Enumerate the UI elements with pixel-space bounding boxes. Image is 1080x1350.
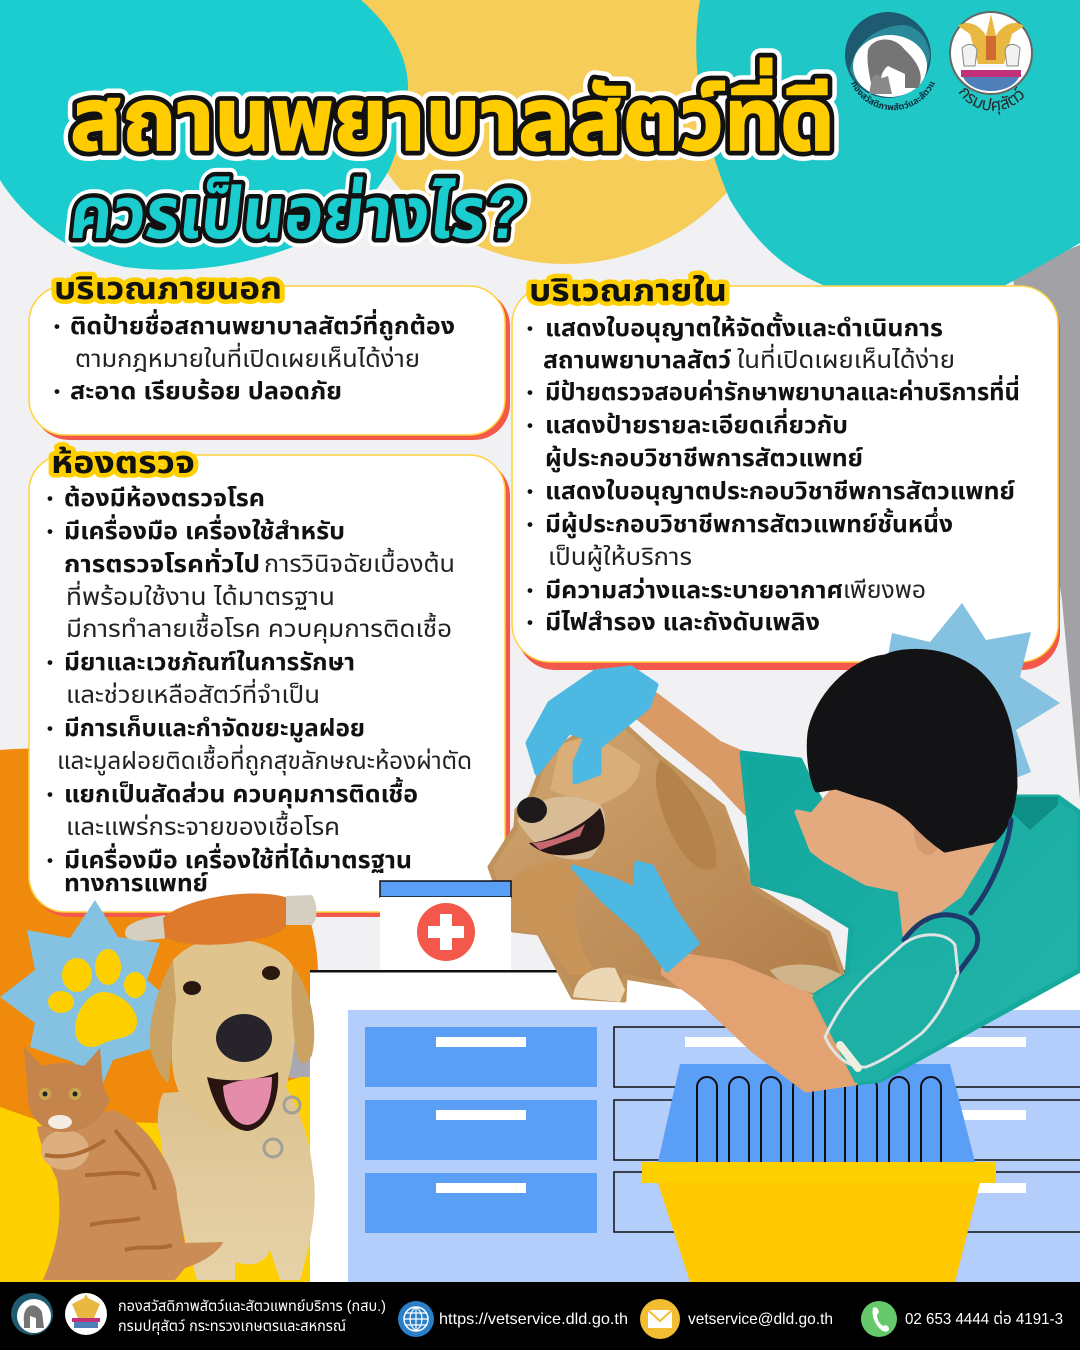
labrador body [158, 1085, 315, 1280]
text: inside area list: ผู้ประกอบวิชาชีพการสัตวแพทย์ [545, 444, 863, 473]
text: examination room list: การวินิจฉัยเบื้องต้น [264, 547, 455, 578]
blue star with paw [0, 900, 170, 1090]
reception counter [310, 970, 1080, 1282]
title [66, 58, 835, 254]
title: ควรเป็นอย่างไร? [66, 174, 530, 254]
vet scrubs [742, 753, 1080, 1083]
text: inside area list: มีป้ายตรวจสอบค่ารักษาพยาบาลและค่าบริการที่นี่ [545, 375, 1020, 406]
footer logos [11, 1293, 107, 1335]
text: examination room list: • [47, 522, 53, 541]
footer organisation text: กรมปศุสัตว์ กระทรวงเกษตรและสหกรณ์ [118, 1318, 346, 1335]
logo: department of livestock: กรมปศุสัตว์ [958, 86, 1024, 115]
text: outside area list: สะอาด เรียบร้อย ปลอดภัย [70, 377, 342, 405]
text: inside area list: • [527, 416, 533, 435]
text: examination room list: • [47, 785, 53, 804]
text: examination room list: และมูลฝอยติดเชื้อที่ถูกสุขลักษณะห้องผ่าตัด [57, 744, 472, 776]
phone text: 02 653 4444 ต่อ 4191-3 [905, 1310, 1063, 1328]
text: inside area list: • [527, 319, 533, 338]
text: outside area list: • [54, 317, 60, 336]
text: examination room list: มียาและเวชภัณฑ์ในการรักษา [64, 649, 355, 676]
heading: examination room: ห้องตรวจ [51, 445, 195, 480]
text: outside area list: • [54, 382, 60, 401]
stethoscope [825, 820, 1011, 1068]
text: examination room list: มีเครื่องมือ เครื่องใช้ที่ได้มาตรฐาน [64, 843, 412, 874]
medical sign [380, 881, 511, 970]
heading: inside area: บริเวณภายใน [529, 273, 727, 308]
text: inside area list: ในที่เปิดเผยเห็นได้ง่าย [737, 343, 955, 374]
text: inside area list: • [527, 482, 533, 501]
photo: labrador dog with toy [125, 894, 316, 1280]
photo: ginger cat [24, 1047, 223, 1280]
text: inside area list: เป็นผู้ให้บริการ [548, 544, 692, 572]
text: examination room list: การตรวจโรคทั่วไป [64, 548, 260, 578]
text: inside area list: • [527, 581, 533, 600]
text: inside area list: • [527, 515, 533, 534]
text: inside area list: มีไฟสำรอง และถังดับเพลิง [545, 609, 820, 636]
text: examination room list: ต้องมีห้องตรวจโรค [64, 484, 265, 512]
text: outside area list: ตามกฎหมายในที่เปิดเผยเห็นได้ง่าย [75, 342, 420, 373]
text: inside area list: แสดงใบอนุญาตประกอบวิชาชีพการสัตวแพทย์ [545, 478, 1015, 506]
vet face and neck [797, 787, 1000, 935]
footer organisation text: กองสวัสดิภาพสัตว์และสัตวแพทย์บริการ (กสบ.) [118, 1298, 386, 1315]
photo: vet examining golden retriever [490, 651, 1080, 1090]
text: examination room list: • [47, 719, 53, 738]
collar rings [264, 1097, 300, 1157]
icon: phone [861, 1301, 897, 1337]
pet carrier [642, 1064, 996, 1282]
text: examination room list: • [47, 851, 53, 870]
title: ควรเป็นอย่างไร? [66, 174, 530, 254]
labrador ears [150, 960, 176, 1083]
website text: https://vetservice.dld.go.th [439, 1311, 628, 1328]
text: examination room list: มีการเก็บและกำจัดขยะมูลฝอย [64, 715, 365, 743]
text: inside area list: สถานพยาบาลสัตว์ [543, 347, 732, 374]
vet arm: lower [663, 953, 855, 1090]
text: inside area list: แสดงใบอนุญาตให้จัดตั้งและดำเนินการ [545, 312, 943, 343]
footer bar [0, 1282, 1080, 1350]
heading: outside area: บริเวณภายนอก [54, 271, 282, 306]
vet hair [809, 651, 1015, 850]
icon: paw [48, 949, 146, 1047]
title: สถานพยาบาลสัตว์ที่ดี [70, 58, 835, 169]
text: examination room list: ทางการแพทย์ [64, 870, 208, 897]
text: examination room list: และแพร่กระจายของเชื้อโรค [66, 810, 340, 841]
icon: mail [640, 1299, 680, 1339]
toy: chicken leg [125, 894, 316, 945]
vet ear [914, 811, 942, 855]
text: examination room list [47, 484, 472, 897]
logo: animal health division [845, 12, 935, 110]
counter drawers [365, 1027, 1080, 1233]
labrador head [170, 938, 296, 1131]
vet arm: upper [635, 695, 746, 813]
text: examination room list: มีการทำลายเชื้อโรค ควบคุมการติดเชื้อ [66, 612, 452, 644]
text: examination room list: ที่พร้อมใช้งาน ได้มาตรฐาน [66, 580, 335, 611]
text: inside area list: แสดงป้ายรายละเอียดเกี่ยวกับ [545, 408, 848, 439]
text: inside area list: • [527, 613, 533, 632]
footer organisation text [118, 1298, 386, 1335]
vet collar [1011, 797, 1058, 830]
text: examination room list: • [47, 489, 53, 508]
text: examination room list: และช่วยเหลือสัตว์ที่จำเป็น [66, 678, 320, 709]
dog muzzle [517, 797, 605, 860]
panel: outside area [29, 271, 510, 440]
text: examination room list: มีเครื่องมือ เครื่องใช้สำหรับ [64, 514, 345, 545]
text: inside area list: มีผู้ประกอบวิชาชีพการสัตวแพทย์ชั้นหนึ่ง [545, 507, 953, 539]
email text: vetservice@dld.go.th [688, 1311, 833, 1328]
text: inside area list: • [527, 383, 533, 402]
icon: globe [398, 1301, 434, 1337]
panel: examination room [29, 445, 510, 917]
text: outside area list [54, 309, 455, 405]
text: examination room list: • [47, 653, 53, 672]
glove: bottom [573, 863, 697, 970]
text: inside area list [527, 312, 1020, 636]
photo: golden retriever [490, 723, 844, 1002]
vet sleeve [812, 960, 1000, 1083]
blue star behind vet [880, 603, 1060, 800]
text: examination room list: แยกเป็นสัดส่วน ควบคุมการติดเชื้อ [64, 777, 418, 809]
text: inside area list: เพียงพอ [843, 577, 926, 604]
glove: top [528, 668, 656, 782]
panel: inside area [512, 273, 1060, 670]
title: สถานพยาบาลสัตว์ที่ดี [70, 58, 835, 169]
title: สถานพยาบาลสัตว์ที่ดี [70, 58, 835, 169]
logo: department of livestock [949, 11, 1033, 115]
text: outside area list: ติดป้ายชื่อสถานพยาบาลสัตว์ที่ถูกต้อง [70, 309, 455, 341]
text: inside area list: มีความสว่างและระบายอากาศ [545, 576, 843, 604]
